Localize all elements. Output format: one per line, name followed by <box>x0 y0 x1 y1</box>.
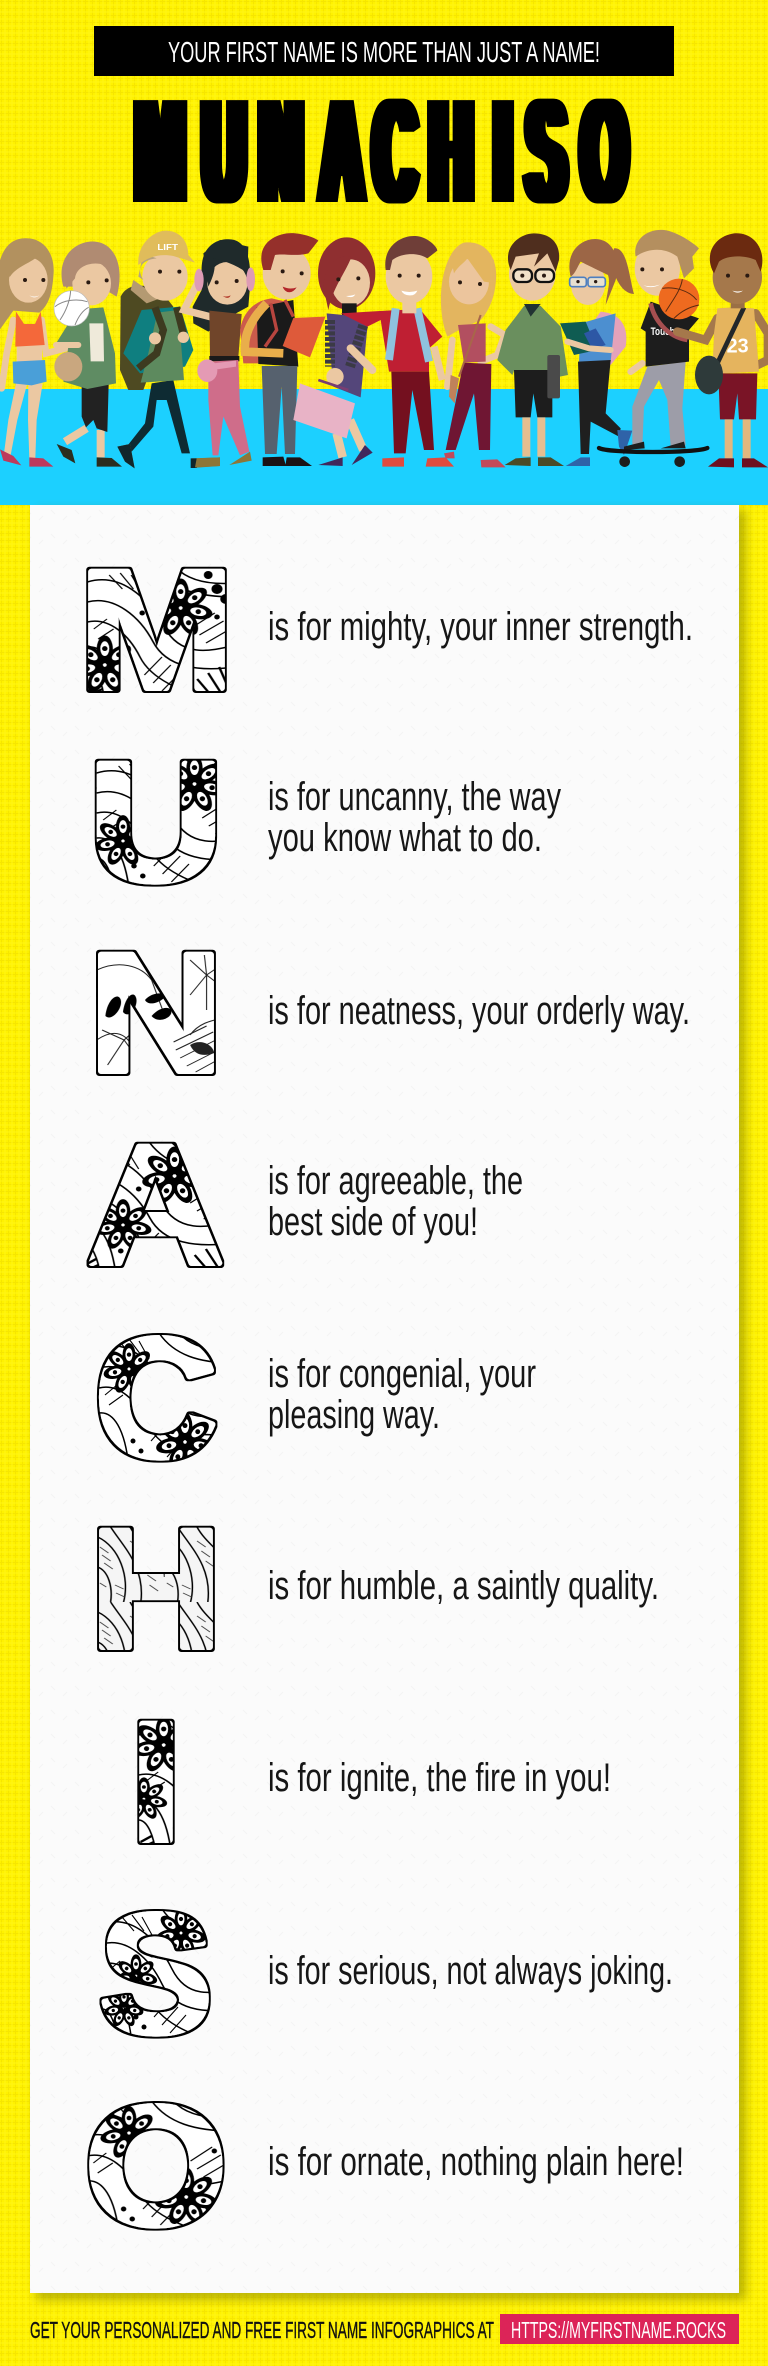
caption I: is for ignite, the fire in you! <box>268 1756 611 1800</box>
person: boy with book <box>240 233 325 466</box>
row S <box>100 1879 673 2068</box>
panel shadow <box>36 510 746 2300</box>
person: girl with pink case <box>293 237 375 466</box>
row I <box>130 1687 611 1876</box>
letter M: M <box>79 535 234 724</box>
caption U: is for uncanny, the way <box>268 775 561 819</box>
row A <box>87 1111 523 1300</box>
people illustration <box>0 230 768 468</box>
blue ground band <box>0 389 768 505</box>
letter C: C <box>95 1303 217 1492</box>
person: boy with cap and backpack <box>117 231 220 468</box>
person: boy with cap and backpack: LIFT <box>157 243 178 252</box>
row O <box>85 2072 684 2261</box>
person: skater with basketball: Touch <box>651 326 675 338</box>
header banner <box>94 26 674 76</box>
left group of people <box>0 231 375 468</box>
row N <box>89 918 690 1107</box>
row M <box>79 535 693 724</box>
person: blonde girl <box>441 242 506 467</box>
title: MUNACHISO <box>136 68 627 234</box>
right group of people <box>341 230 768 467</box>
person: girl in orange top <box>0 238 78 467</box>
letter N: N <box>89 918 223 1107</box>
person: boy in yellow jersey <box>677 233 768 467</box>
person: boy with glasses <box>497 233 568 466</box>
caption C: is for congenial, your <box>268 1352 536 1396</box>
footer link badge <box>500 2314 739 2344</box>
caption A: is for agreeable, the <box>268 1159 523 1203</box>
letter O: O <box>85 2072 227 2261</box>
row H <box>90 1495 659 1684</box>
letter U: U <box>89 727 223 916</box>
white panel <box>30 505 739 2293</box>
letter H: H <box>90 1495 222 1684</box>
person: boy in red shirt <box>341 236 454 467</box>
person: girl with volleyball <box>54 242 122 467</box>
person: girl with ponytail and book <box>560 239 634 466</box>
row U <box>89 727 561 916</box>
letter A: A <box>87 1111 224 1300</box>
person: girl with headphones <box>184 239 255 467</box>
person: skater with basketball <box>599 230 707 467</box>
letter I: I <box>130 1687 182 1876</box>
caption A: best side of you! <box>268 1200 478 1244</box>
row C <box>95 1303 536 1492</box>
caption C: pleasing way. <box>268 1393 440 1437</box>
person: boy in yellow jersey: 23 <box>727 335 749 358</box>
letter S: S <box>100 1879 212 2068</box>
caption U: you know what to do. <box>268 816 542 860</box>
